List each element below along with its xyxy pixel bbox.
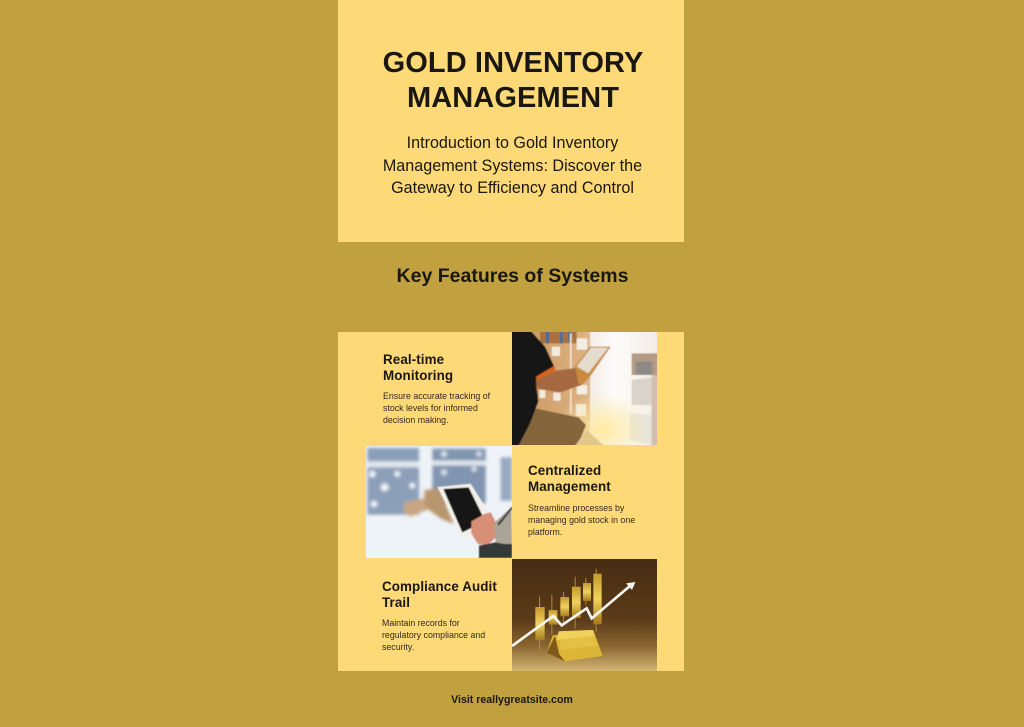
panel: title card <box>338 0 684 242</box>
feature description: decision making. <box>383 415 449 425</box>
feature text: real-time monitoring <box>383 352 490 425</box>
feature heading <box>382 579 497 610</box>
feature heading <box>383 352 453 383</box>
feature description: platform. <box>528 527 562 537</box>
feature description: stock levels for informed <box>383 403 478 413</box>
feature description: Streamline processes by <box>528 503 624 513</box>
feature heading: Real-time <box>383 352 444 367</box>
title: GOLD INVENTORY <box>383 46 643 78</box>
subtitle: Introduction to Gold Inventory <box>407 134 618 152</box>
feature heading: Management <box>528 479 611 494</box>
feature description <box>383 391 490 425</box>
subtitle: Gateway to Efficiency and Control <box>391 179 634 197</box>
title <box>383 46 643 114</box>
feature text: centralized management <box>528 463 635 537</box>
panel: features <box>338 332 684 671</box>
feature heading: Monitoring <box>383 368 453 383</box>
feature text: compliance audit trail <box>382 579 497 652</box>
feature description: managing gold stock in one <box>528 515 635 525</box>
feature heading <box>528 463 611 494</box>
photo: hand holding tablet <box>366 446 512 558</box>
feature heading: Centralized <box>528 463 601 478</box>
feature heading: Compliance Audit <box>382 579 497 594</box>
feature description: Ensure accurate tracking of <box>383 391 490 401</box>
footer link: Visit reallygreatsite.com <box>451 694 573 706</box>
photo: gold bars with rising chart arrow <box>512 559 657 671</box>
feature description <box>382 618 485 652</box>
subtitle: Management Systems: Discover the <box>383 157 642 175</box>
section heading: Key Features of Systems <box>397 265 628 287</box>
feature description <box>528 503 635 537</box>
feature description: Maintain records for <box>382 618 460 628</box>
subtitle <box>383 134 642 197</box>
feature heading: Trail <box>382 595 410 610</box>
feature description: regulatory compliance and <box>382 630 485 640</box>
photo: worker with clipboard in warehouse <box>512 332 657 445</box>
title: MANAGEMENT <box>407 82 619 114</box>
feature description: security. <box>382 642 414 652</box>
